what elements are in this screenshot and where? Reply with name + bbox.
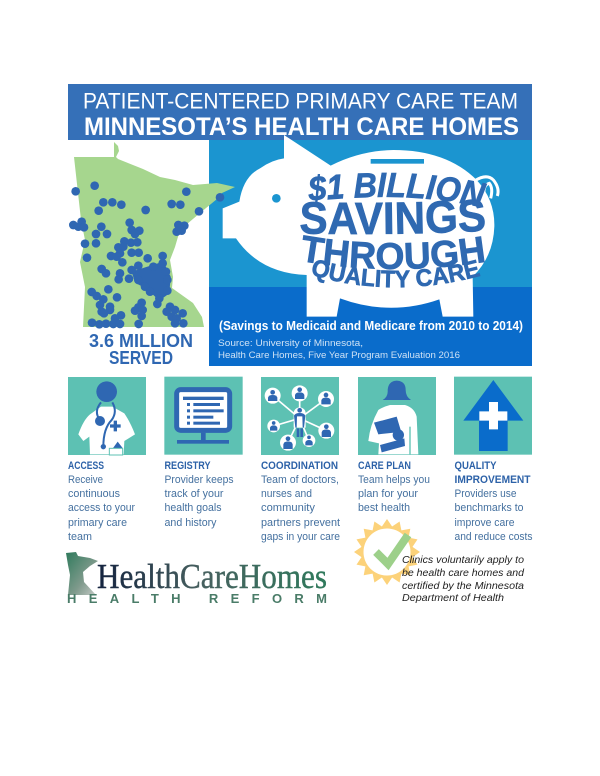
icon: doctor <box>68 377 146 455</box>
text: care plan: CARE PLAN <box>358 460 411 472</box>
certification note: certified by the Minnesota <box>402 580 524 592</box>
icon: approval badge <box>354 519 420 585</box>
text: quality improvement: improve care <box>454 517 514 529</box>
logo: Health Care Homes <box>66 552 327 606</box>
served statistic <box>89 331 193 368</box>
icon: care plan <box>358 377 436 455</box>
text: care plan: plan for your <box>358 488 418 500</box>
piggy bank <box>223 135 498 317</box>
piggy bank headline: THROUGH <box>302 235 485 270</box>
icon: registry monitor <box>164 377 243 455</box>
panel: savings background <box>209 140 532 366</box>
text: quality improvement: Providers use <box>454 488 516 500</box>
text: coordination: partners prevent <box>261 517 340 529</box>
text: coordination: gaps in your care <box>261 531 340 543</box>
text: coordination: community <box>261 502 315 514</box>
text: registry: track of your <box>164 488 224 500</box>
certification note: be health care homes and <box>402 567 525 579</box>
text: access <box>68 460 135 543</box>
text: registry: health goals <box>164 502 222 514</box>
header banner: PATIENT-CENTERED PRIMARY CARE TEAM <box>83 88 518 114</box>
icon: quality arrow <box>454 377 532 455</box>
piggy bank headline <box>300 172 488 288</box>
text: quality improvement <box>454 460 533 543</box>
piggy bank headline: $1 BILLION <box>308 172 488 206</box>
logo: Health Care Homes: HealthCareHomes <box>97 557 327 596</box>
text: care plan: best health <box>358 502 410 514</box>
logo: Health Care Homes: HEALTH REFORM <box>67 591 327 606</box>
certification note: Clinics voluntarily apply to <box>402 554 524 566</box>
text: access: continuous <box>68 488 120 500</box>
served statistic: 3.6 MILLION <box>89 331 193 351</box>
text: registry: REGISTRY <box>164 460 211 472</box>
header banner: MINNESOTA’S HEALTH CARE HOMES <box>84 113 519 141</box>
text: coordination: Team of doctors, <box>261 474 339 486</box>
source: Source: University of Minnesota, <box>218 338 363 349</box>
text: quality improvement: and reduce costs <box>454 531 533 543</box>
text: access: primary care <box>68 517 127 529</box>
text: coordination <box>261 460 340 543</box>
text: registry <box>164 460 234 529</box>
text: care plan: Team helps you <box>358 474 430 486</box>
icon: care coordination network <box>261 377 339 455</box>
text: coordination: COORDINATION <box>261 460 338 472</box>
map of Minnesota with clinic dots <box>69 142 235 329</box>
text: access: team <box>68 531 92 543</box>
certification note: Department of Health <box>402 592 504 604</box>
text: registry: Provider keeps <box>164 474 234 486</box>
text: access: ACCESS <box>68 460 104 472</box>
text: quality improvement: benchmarks to <box>454 502 524 514</box>
piggy bank headline: QUALITY CARE <box>312 260 480 288</box>
text: coordination: nurses and <box>261 488 312 500</box>
header banner <box>68 84 532 141</box>
source: Health Care Homes, Five Year Program Evaluation 2016 <box>218 350 460 361</box>
source <box>218 338 460 361</box>
certification note <box>402 554 525 604</box>
served statistic: SERVED <box>109 348 173 368</box>
savings note: (Savings to Medicaid and Medicare from 2010 to 2014) <box>219 318 523 333</box>
text: access: access to your <box>68 502 135 514</box>
text: registry: and history <box>164 517 217 529</box>
text: access: Receive <box>68 474 103 486</box>
text: quality improvement: QUALITY <box>454 460 497 472</box>
text: care plan <box>358 460 430 514</box>
piggy bank headline: SAVINGS <box>300 199 485 234</box>
text: quality improvement: IMPROVEMENT <box>454 474 531 486</box>
